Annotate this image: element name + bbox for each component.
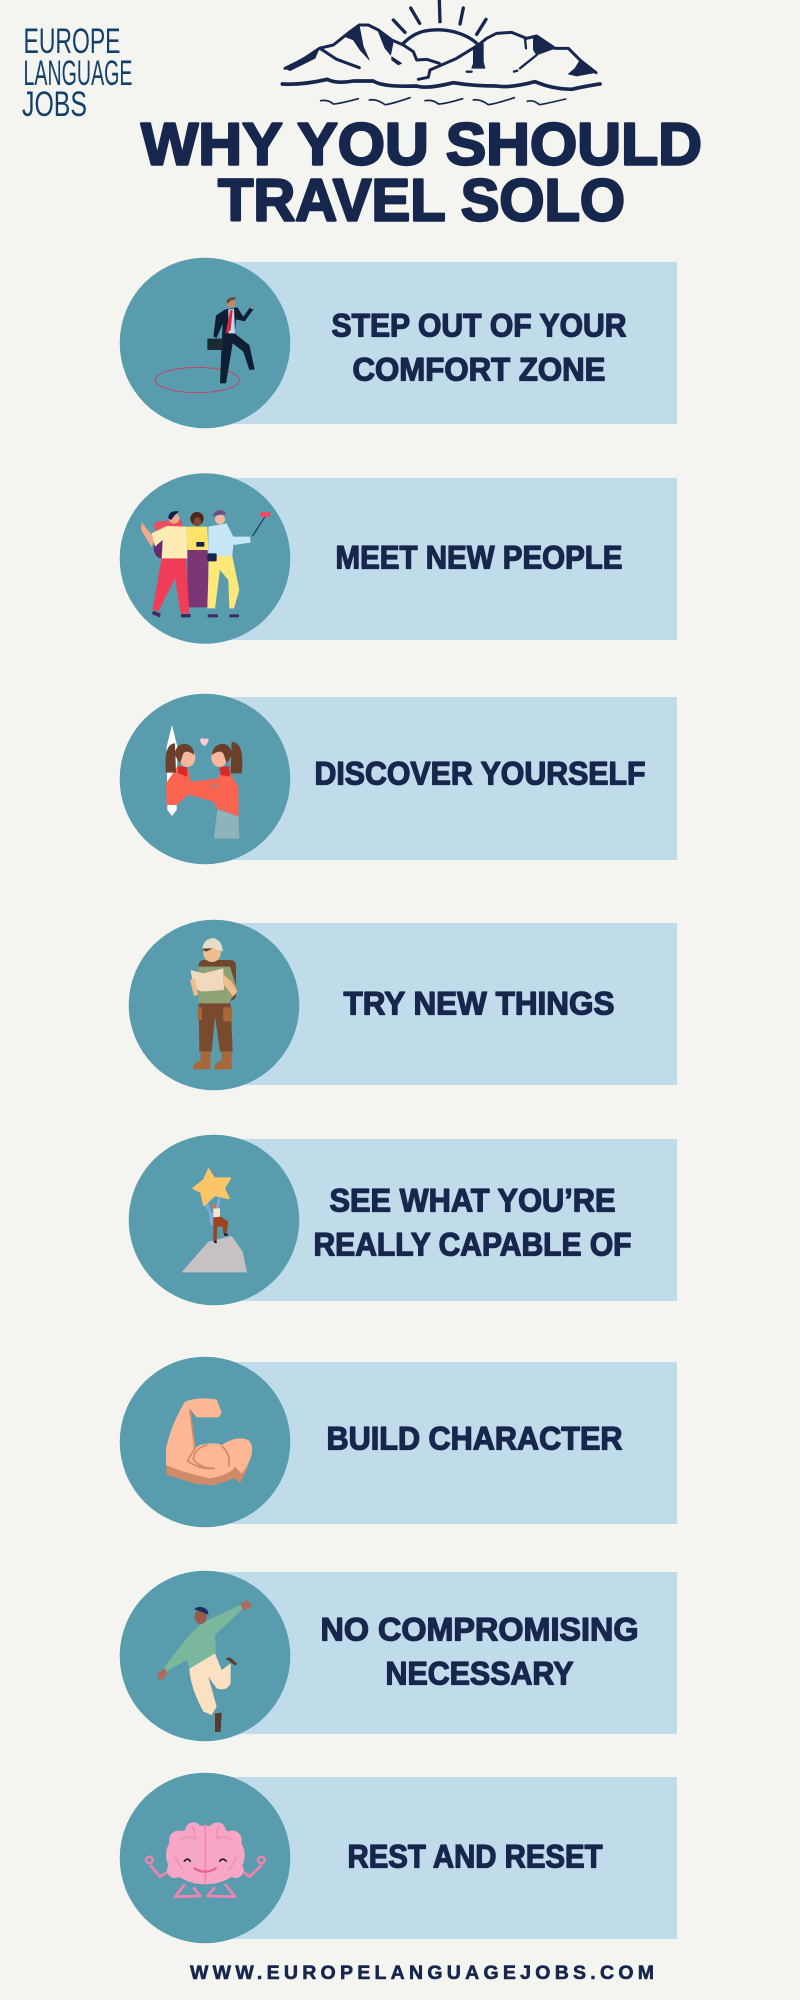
icon: jumping man xyxy=(157,1601,252,1732)
icon: three friends taking a selfie xyxy=(141,510,270,617)
website url: WWW.EUROPELANGUAGEJOBS.COM xyxy=(190,1962,654,1984)
label: STEP OUT OF YOUR xyxy=(332,308,626,344)
icon: mountains and sun xyxy=(282,1,600,105)
icon: woman embracing her reflection xyxy=(166,725,242,839)
label: NECESSARY xyxy=(386,1656,574,1692)
panel: meet new people xyxy=(120,473,677,644)
label: REALLY CAPABLE OF xyxy=(314,1226,632,1262)
title: WHY YOU SHOULD xyxy=(141,110,702,178)
label: MEET NEW PEOPLE xyxy=(336,540,622,576)
label xyxy=(332,308,626,388)
panel: build character xyxy=(120,1357,677,1527)
label: SEE WHAT YOU’RE xyxy=(330,1182,616,1218)
panel: try new things xyxy=(129,920,677,1090)
logo: Europe Language Jobs: JOBS xyxy=(22,85,87,124)
logo: Europe Language Jobs: LANGUAGE xyxy=(24,54,132,93)
label: NO COMPROMISING xyxy=(320,1612,638,1648)
label xyxy=(314,1182,632,1262)
label: DISCOVER YOURSELF xyxy=(314,756,646,792)
label: REST AND RESET xyxy=(348,1838,603,1874)
title xyxy=(141,110,702,234)
label: COMFORT ZONE xyxy=(352,352,606,388)
label xyxy=(320,1612,638,1692)
panel: see what you're really capable of xyxy=(129,1135,677,1305)
icon: businessman stepping out of circle xyxy=(155,297,255,393)
title: TRAVEL SOLO xyxy=(218,166,625,234)
panel: step out of your comfort zone xyxy=(120,258,677,428)
icon: hiker reading a map xyxy=(190,938,237,1069)
panel: no compromising necessary xyxy=(120,1571,677,1741)
logo: Europe Language Jobs xyxy=(22,22,132,124)
panel: discover yourself xyxy=(120,694,677,864)
icon: meditating brain xyxy=(146,1822,265,1897)
icon: person lifting a star on a rock xyxy=(182,1169,247,1272)
label: TRY NEW THINGS xyxy=(344,986,614,1022)
icon: flexed arm xyxy=(166,1398,252,1485)
logo: Europe Language Jobs: EUROPE xyxy=(24,22,120,61)
panel: rest and reset xyxy=(120,1773,677,1943)
label: BUILD CHARACTER xyxy=(326,1420,622,1456)
